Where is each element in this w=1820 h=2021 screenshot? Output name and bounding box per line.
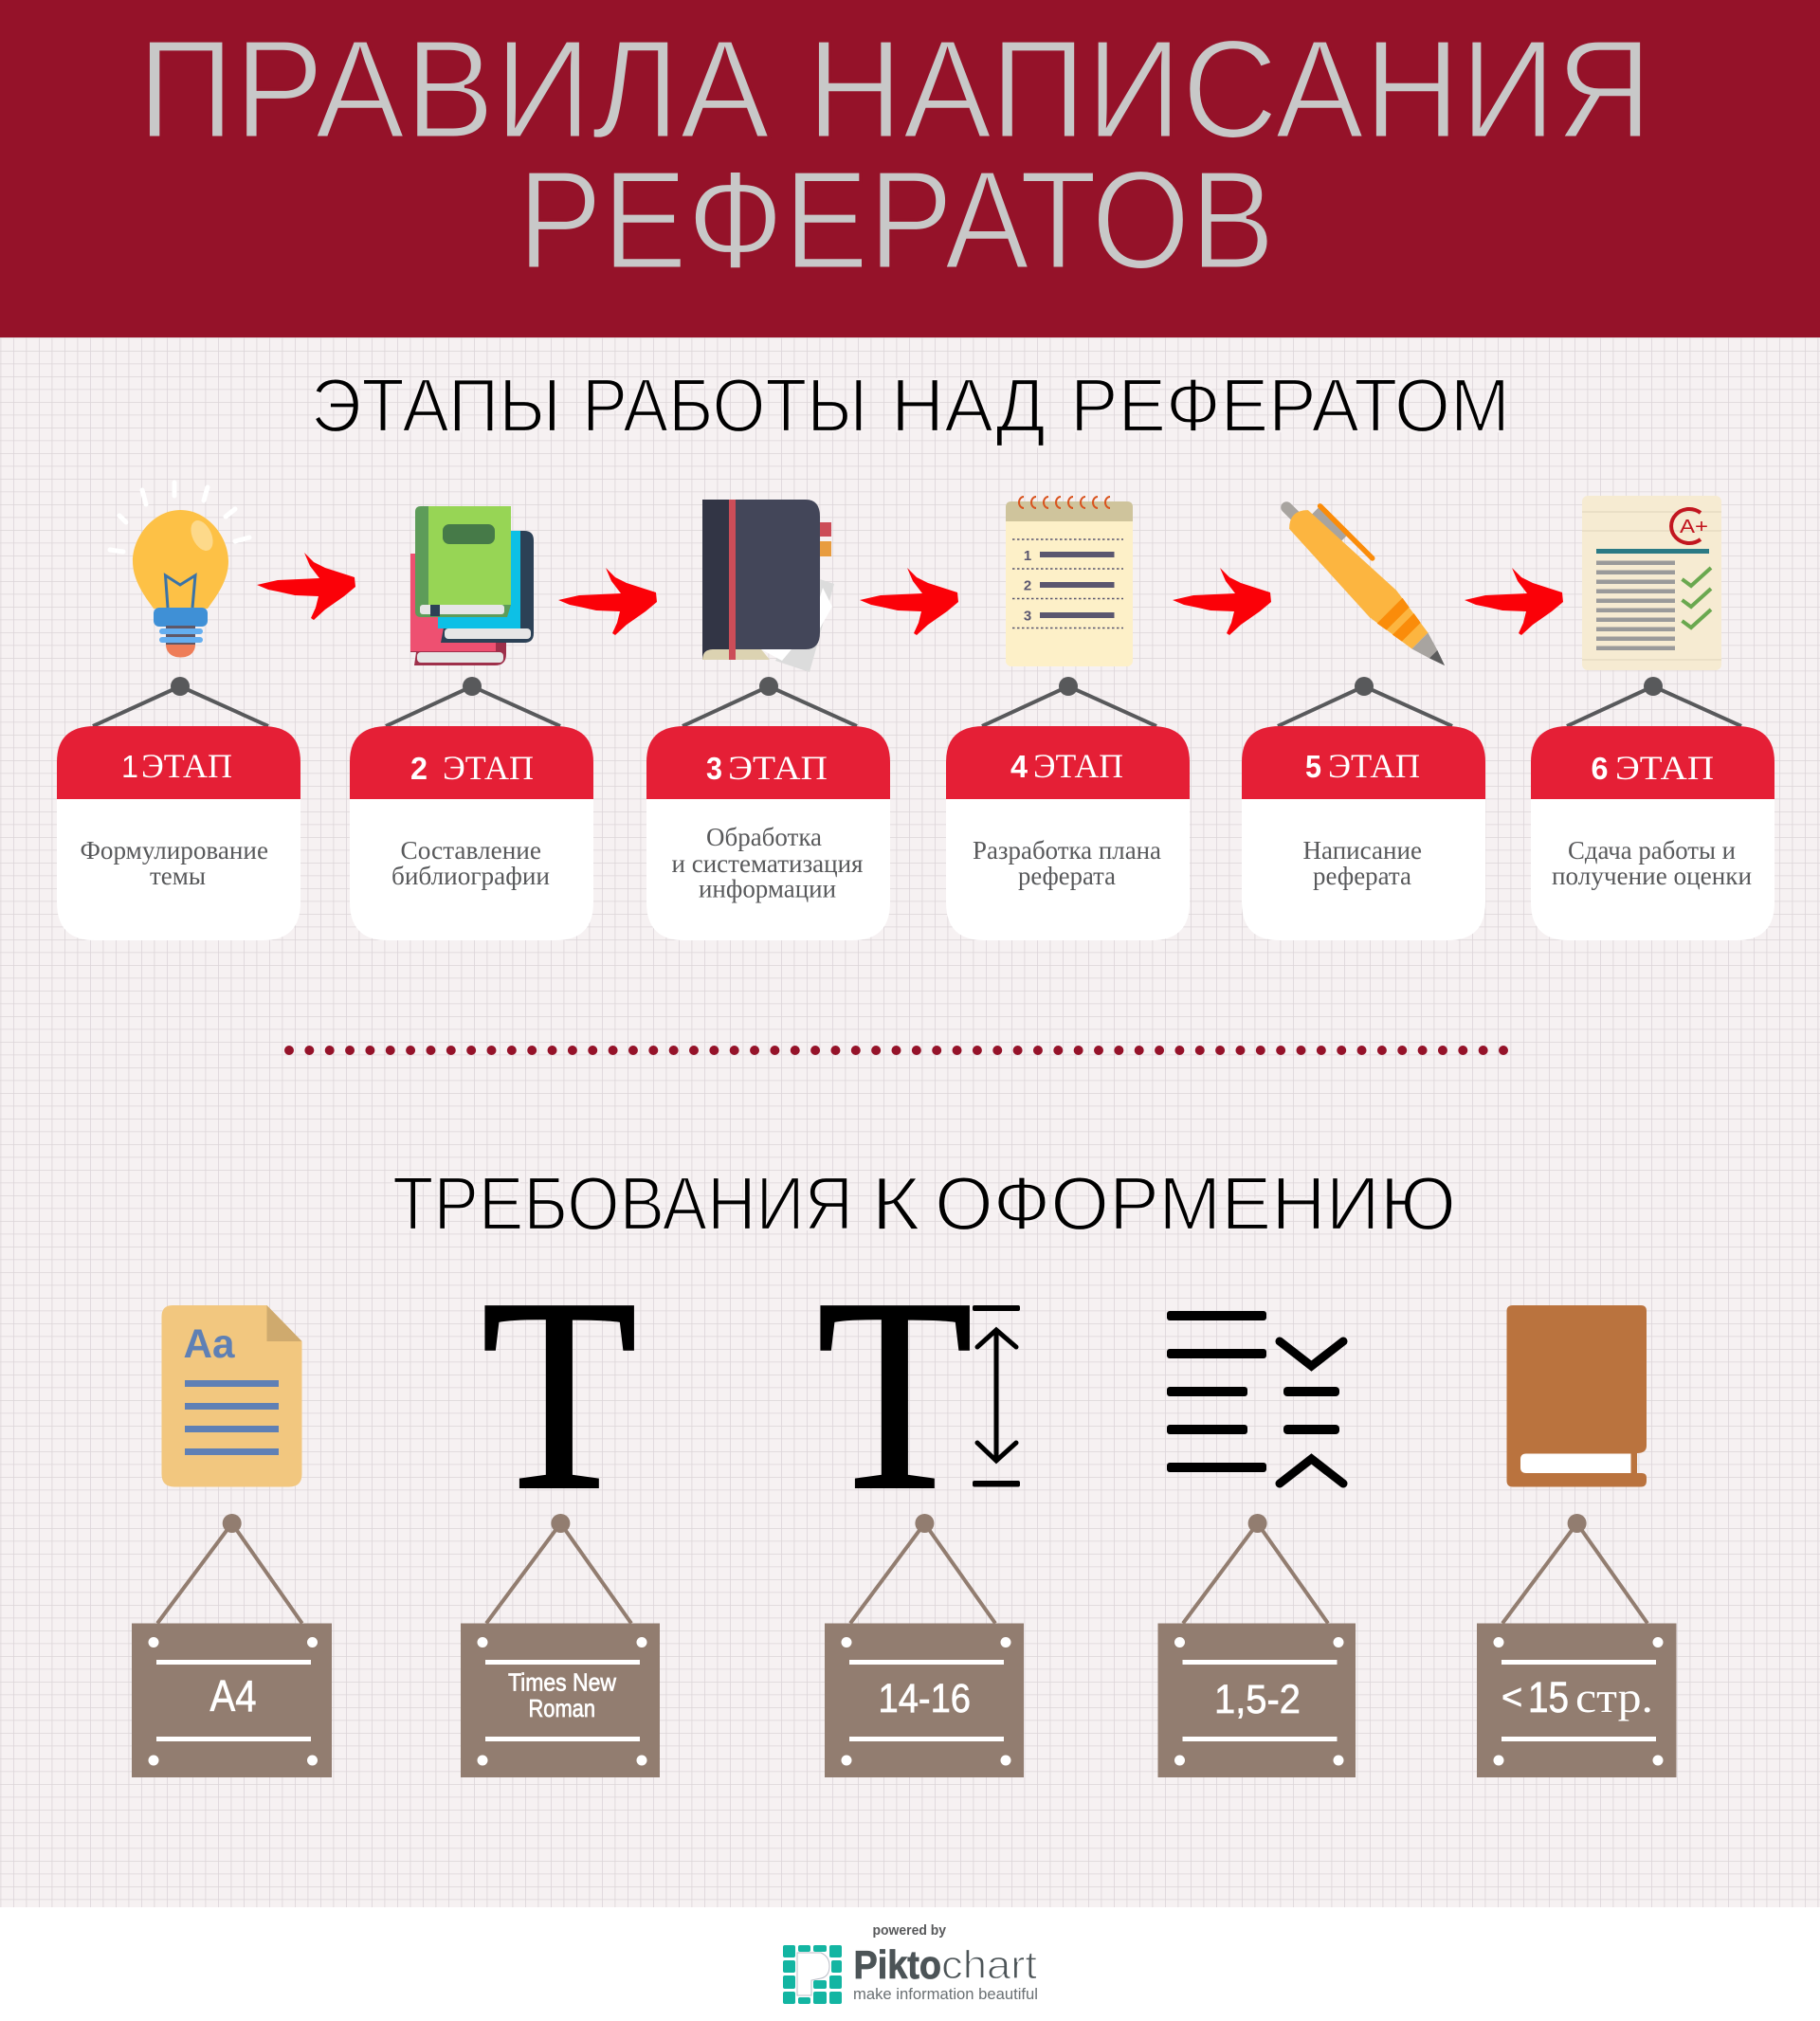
- icon: pen: [1269, 486, 1463, 679]
- panel: stage 3: 3: [706, 751, 722, 786]
- title line 1: ПРАВИЛА: [137, 11, 770, 168]
- panel: stage 3: и систематизация: [671, 849, 863, 878]
- icon: A4 document: Aa: [184, 1321, 236, 1367]
- panel: stage 2: библиографии: [391, 862, 550, 890]
- sign: font family: Times New: [508, 1668, 616, 1697]
- sign: font size: 14-16: [878, 1676, 971, 1721]
- panel: stage 1: ЭТАП: [141, 747, 232, 785]
- panel: stage 5: [1242, 677, 1485, 940]
- powered by label: powered by: [872, 1923, 946, 1939]
- icon: numbered notepad: 1: [1024, 548, 1031, 564]
- panel: stage 6: [1531, 677, 1774, 940]
- arrow 3: [860, 568, 958, 635]
- panel: stage 5: реферата: [1313, 862, 1411, 890]
- panel: stage 4: 4: [1010, 749, 1028, 784]
- icon: book: [1507, 1305, 1647, 1486]
- tagline: make information beautiful: [853, 1985, 1038, 2003]
- heading: formatting requirements: К: [871, 1161, 920, 1246]
- heading: stages: ЭТАПЫ: [311, 363, 561, 447]
- sign: line spacing value: 1,5-2: [1214, 1677, 1301, 1722]
- panel: stage 4: Разработка плана: [973, 836, 1161, 865]
- icon: Times New Roman T: T: [482, 1242, 637, 1547]
- heading: formatting requirements: [392, 1161, 1456, 1246]
- sign: paper format: A4: [210, 1671, 256, 1721]
- icon: numbered notepad: [1006, 497, 1133, 666]
- wordmark: [853, 1942, 1037, 1987]
- panel: stage 1: темы: [150, 862, 206, 890]
- icon: numbered notepad: 3: [1024, 609, 1031, 624]
- sign: page count: [1477, 1514, 1676, 1777]
- panel: stage 5: Написание: [1302, 836, 1422, 865]
- icon: numbered notepad: 2: [1024, 578, 1031, 593]
- sign: font family: Roman: [529, 1694, 595, 1722]
- panel: stage 3: ЭТАП: [728, 749, 828, 787]
- icon: graded paper: [1582, 496, 1721, 670]
- title line 2: РЕФЕРАТОВ: [518, 142, 1275, 299]
- icon: notebook: [702, 500, 834, 672]
- icon: light bulb: [110, 482, 249, 658]
- title banner: [0, 0, 1820, 337]
- heading: stages: [311, 363, 1510, 447]
- panel: stage 6: 6: [1591, 751, 1608, 786]
- heading: stages: РЕФЕРАТОМ: [1070, 363, 1510, 447]
- icon: A4 document: [161, 1305, 301, 1486]
- sign: paper format: [132, 1514, 332, 1777]
- panel: stage 2: [350, 677, 593, 940]
- panel: stage 1: 1: [121, 749, 138, 784]
- wordmark: chart: [941, 1942, 1037, 1987]
- panel: stage 4: ЭТАП: [1033, 747, 1123, 785]
- title line 1: НАПИСАНИЯ: [807, 11, 1652, 168]
- panel: stage 2: 2: [410, 751, 428, 786]
- panel: stage 6: ЭТАП: [1615, 749, 1714, 787]
- icon: line spacing: [1167, 1311, 1343, 1484]
- sign: font size: [825, 1514, 1024, 1777]
- heading: formatting requirements: ТРЕБОВАНИЯ: [392, 1161, 853, 1246]
- icon: font size T: T: [817, 1242, 973, 1547]
- heading: formatting requirements: ОФОРМЕНИЮ: [935, 1161, 1456, 1246]
- panel: stage 1: Формулирование: [80, 836, 268, 865]
- panel: stage 4: реферата: [1018, 862, 1116, 890]
- sign: page count: стр.: [1575, 1673, 1653, 1721]
- heading: stages: РАБОТЫ: [582, 363, 867, 447]
- panel: stage 2: Составление: [400, 836, 541, 865]
- arrow 2: [558, 568, 657, 635]
- sign: page count: 15: [1528, 1673, 1569, 1721]
- wordmark: Pikto: [853, 1942, 941, 1987]
- panel: stage 6: Сдача работы и: [1568, 836, 1736, 865]
- sign: page count: <: [1502, 1678, 1522, 1718]
- footer: Piktochart branding: [0, 1907, 1820, 2021]
- heading: stages: НАД: [891, 363, 1046, 447]
- sign: font family: [461, 1514, 660, 1777]
- icon: graded paper: A+: [1680, 517, 1708, 537]
- panel: stage 4: [946, 677, 1190, 940]
- logo mark: [783, 1945, 842, 2004]
- arrow 1: [257, 553, 355, 620]
- panel: stage 3: Обработка: [706, 823, 822, 851]
- panel: stage 3: информации: [699, 874, 836, 902]
- sign: line spacing value: [1158, 1514, 1356, 1777]
- panel: stage 1: [57, 677, 300, 940]
- icon: stack of books: [410, 506, 534, 665]
- panel: stage 6: получение оценки: [1552, 862, 1752, 890]
- panel: stage 2: ЭТАП: [443, 749, 534, 787]
- panel: stage 3: [646, 677, 890, 940]
- arrow 5: [1465, 568, 1563, 635]
- title line 1: [137, 11, 1652, 168]
- arrow 4: [1173, 568, 1271, 635]
- panel: stage 5: 5: [1305, 749, 1321, 784]
- panel: stage 5: ЭТАП: [1328, 747, 1420, 785]
